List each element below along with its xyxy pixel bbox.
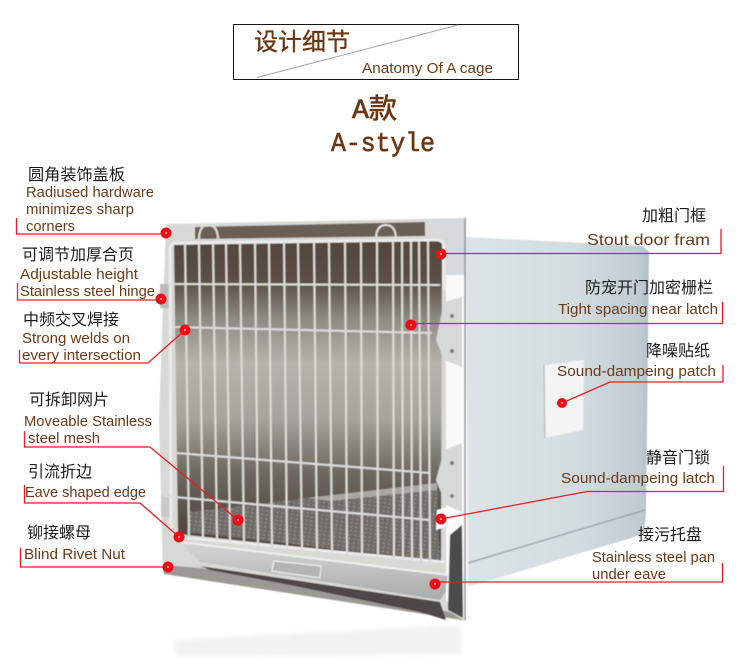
callout: rivet nut: Blind Rivet Nut: [24, 546, 126, 563]
callout: adjustable hinge: [18, 246, 166, 304]
callout: strong welds: Strong welds on: [22, 330, 130, 347]
heading: A款: A款: [352, 93, 397, 127]
door frame: [159, 218, 466, 621]
callout: rivet nut: 铆接螺母: [27, 524, 91, 542]
sound patch: [544, 360, 584, 438]
title box: [234, 24, 518, 80]
callout: steel pan: under eave: [592, 566, 666, 583]
title box: 设计细节: [254, 29, 350, 56]
callout: door frame: [436, 207, 721, 260]
callout: steel pan: 接污托盘: [638, 525, 702, 544]
callout: eave edge: Eave shaped edge: [25, 484, 146, 501]
door wire mesh: [170, 240, 444, 537]
callout: eave edge: 引流折边: [28, 463, 92, 481]
callout: moveable mesh: [24, 391, 244, 526]
callout: tight spacing: Tight spacing near latch: [558, 301, 718, 318]
heading: A-style: A-style: [331, 130, 435, 160]
callout: radiused hardware: minimizes sharp: [26, 201, 134, 218]
callout: rivet nut: [20, 524, 174, 572]
callout: sound patch: Sound-dampeing patch: [557, 363, 716, 380]
callout: moveable mesh: 可拆卸网片: [29, 391, 109, 409]
door latches: [436, 297, 462, 367]
callout: strong welds: every intersection: [22, 347, 141, 364]
cage product illustration: [159, 218, 649, 657]
reflection: [173, 625, 462, 657]
callout: steel pan: [430, 525, 722, 590]
callout: adjustable hinge: Stainless steel hinge: [20, 283, 155, 300]
callout: silent latch: [436, 449, 724, 524]
callout: radiused hardware: [16, 166, 172, 238]
cage side panel: [466, 237, 649, 587]
callout: tight spacing: [406, 279, 722, 330]
callout: adjustable hinge: Adjustable height: [20, 266, 139, 283]
callout: silent latch: Sound-dampeing latch: [561, 470, 715, 487]
callout: radiused hardware: Radiused hardware: [26, 184, 154, 201]
cage interior: [174, 241, 442, 562]
callout: strong welds: 中频交叉焊接: [23, 311, 119, 329]
callout: silent latch: 静音门锁: [646, 449, 710, 467]
callout: radiused hardware: corners: [26, 218, 75, 235]
callout: moveable mesh: Moveable Stainless: [24, 413, 152, 430]
callout: strong welds: [20, 311, 190, 364]
title box: Anatomy Of A cage: [362, 61, 493, 77]
callout: eave edge: [24, 463, 184, 542]
callout: steel pan: Stainless steel pan: [592, 549, 715, 566]
callout: sound patch: [557, 342, 723, 408]
callout: sound patch: 降噪贴纸: [646, 342, 710, 360]
callout: tight spacing: 防宠开门加密栅栏: [585, 279, 713, 297]
hinges: [160, 284, 171, 308]
callout: moveable mesh: steel mesh: [28, 430, 100, 447]
callout: door frame: Stout door fram: [587, 232, 710, 249]
callout: door frame: 加粗门框: [642, 207, 706, 225]
callout: adjustable hinge: 可调节加厚合页: [22, 246, 134, 264]
pan under eave: [180, 542, 448, 600]
callout: radiused hardware: 圆角装饰盖板: [28, 166, 125, 184]
